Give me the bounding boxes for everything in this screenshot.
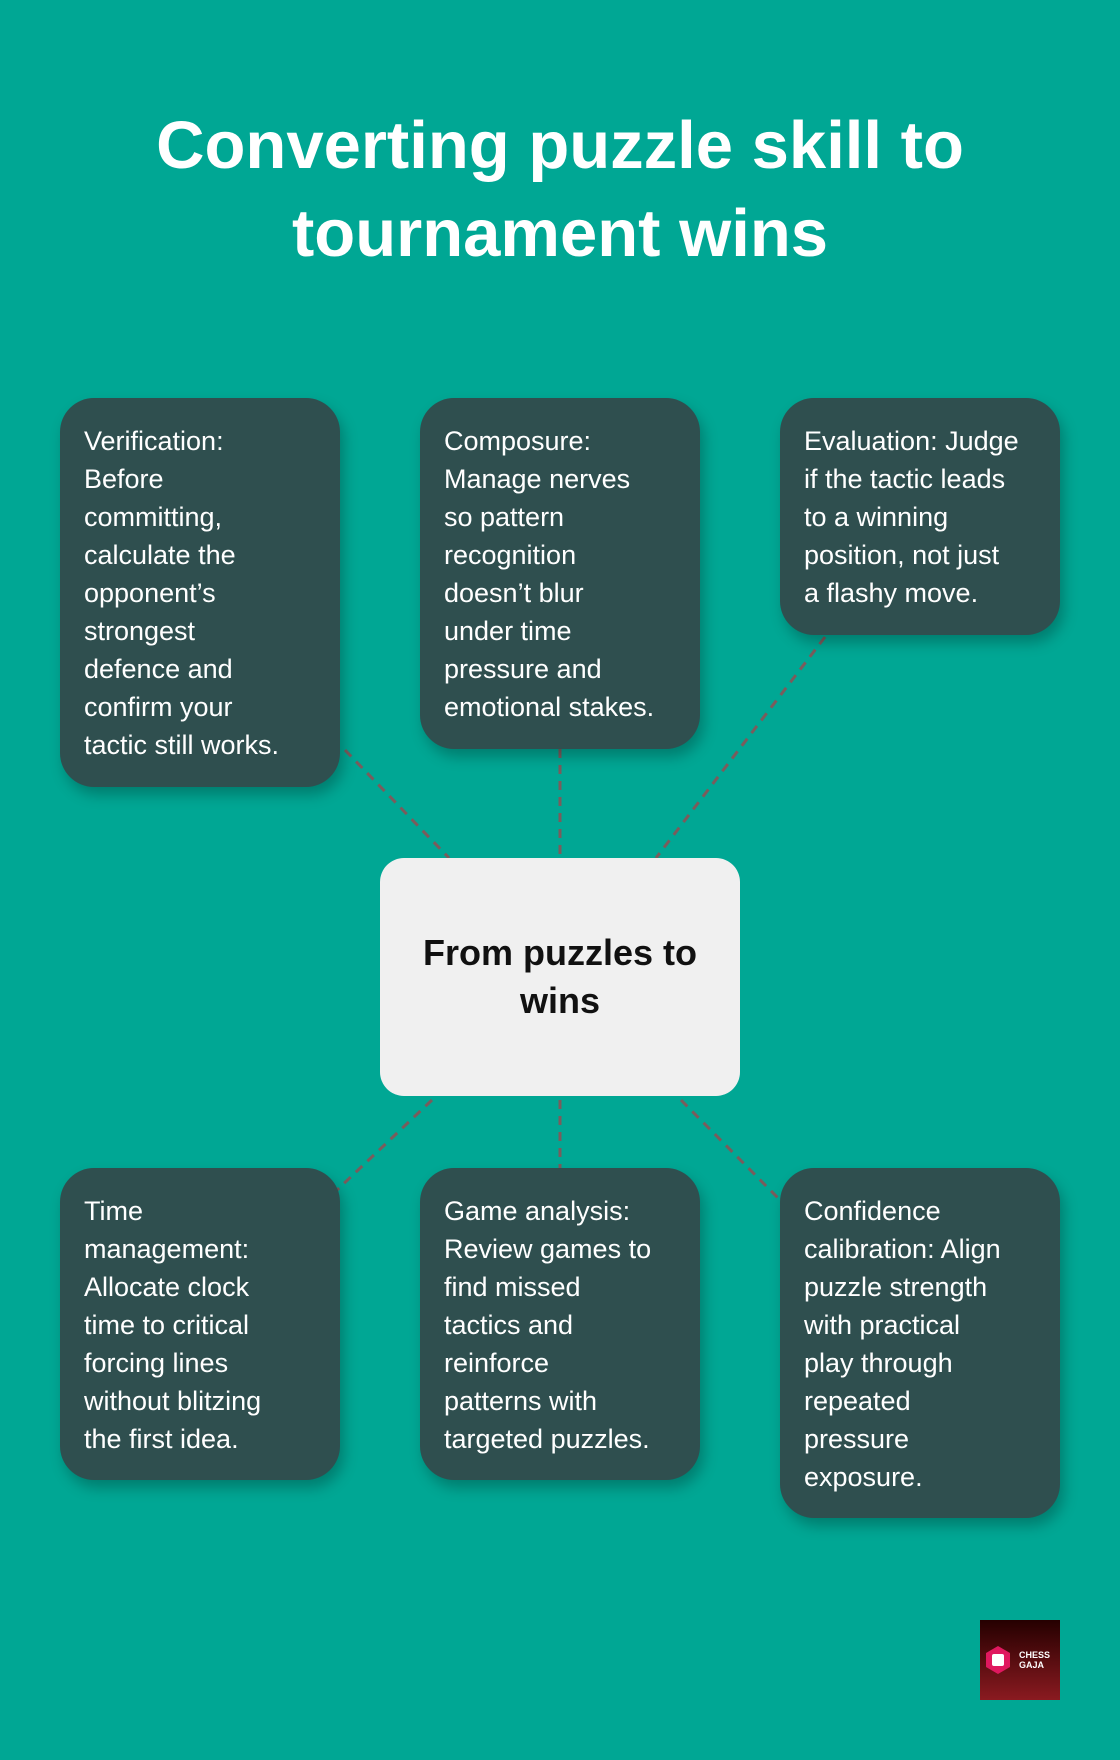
card: verification: confirm your: [84, 692, 233, 722]
card: verification: [60, 398, 340, 787]
card: time management: Time: [84, 1196, 143, 1226]
card: composure: pressure and: [444, 654, 602, 684]
card: confidence calibration: repeated: [804, 1386, 911, 1416]
card: confidence calibration: calibration: Align: [804, 1234, 1001, 1264]
card: composure: so pattern: [444, 502, 564, 532]
card: confidence calibration: pressure: [804, 1424, 909, 1454]
card: composure: recognition: [444, 540, 576, 570]
card: game analysis: reinforce: [444, 1348, 549, 1378]
card: confidence calibration: with practical: [804, 1310, 960, 1340]
logo text: [1019, 1650, 1050, 1670]
card: composure: emotional stakes.: [444, 692, 654, 722]
card: composure: doesn’t blur: [444, 578, 584, 608]
card: verification: Before: [84, 464, 164, 494]
card: time management: Allocate clock: [84, 1272, 249, 1302]
card: confidence calibration: play through: [804, 1348, 953, 1378]
card: evaluation: to a winning: [804, 502, 948, 532]
card: confidence calibration: exposure.: [804, 1462, 923, 1492]
card: verification: strongest: [84, 616, 195, 646]
card: game analysis: find missed: [444, 1272, 581, 1302]
card: game analysis: tactics and: [444, 1310, 573, 1340]
center box: [380, 858, 740, 1096]
card: composure: Manage nerves: [444, 464, 630, 494]
logo: [980, 1620, 1060, 1700]
card: time management: [60, 1168, 340, 1480]
card: verification: calculate the: [84, 540, 236, 570]
card: verification: committing,: [84, 502, 222, 532]
title: tournament wins: [292, 196, 828, 271]
card: confidence calibration: [780, 1168, 1060, 1518]
card: game analysis: patterns with: [444, 1386, 597, 1416]
card: time management: management:: [84, 1234, 249, 1264]
card: time management: the first idea.: [84, 1424, 239, 1454]
card: game analysis: [420, 1168, 700, 1480]
logo text: GAJA: [1019, 1660, 1044, 1670]
card: composure: Composure:: [444, 426, 591, 456]
title: [156, 108, 964, 271]
card: game analysis: Game analysis:: [444, 1196, 630, 1226]
card: time management: without blitzing: [84, 1386, 261, 1416]
center box: wins: [520, 980, 600, 1021]
icon: hexagon: [986, 1646, 1010, 1674]
title: Converting puzzle skill to: [156, 108, 964, 183]
card: composure: [420, 398, 700, 749]
card: composure: under time: [444, 616, 572, 646]
card: confidence calibration: puzzle strength: [804, 1272, 987, 1302]
logo text: CHESS: [1019, 1650, 1050, 1660]
card: game analysis: targeted puzzles.: [444, 1424, 650, 1454]
card: verification: Verification:: [84, 426, 224, 456]
card: confidence calibration: Confidence: [804, 1196, 941, 1226]
card: evaluation: a flashy move.: [804, 578, 978, 608]
card: game analysis: Review games to: [444, 1234, 651, 1264]
center box: From puzzles to: [423, 932, 697, 973]
card: evaluation: if the tactic leads: [804, 464, 1005, 494]
card: time management: forcing lines: [84, 1348, 228, 1378]
card: evaluation: position, not just: [804, 540, 999, 570]
card: evaluation: [780, 398, 1060, 635]
card: verification: tactic still works.: [84, 730, 279, 760]
card: verification: defence and: [84, 654, 233, 684]
card: evaluation: Evaluation: Judge: [804, 426, 1019, 456]
card: time management: time to critical: [84, 1310, 249, 1340]
card: verification: opponent’s: [84, 578, 216, 608]
